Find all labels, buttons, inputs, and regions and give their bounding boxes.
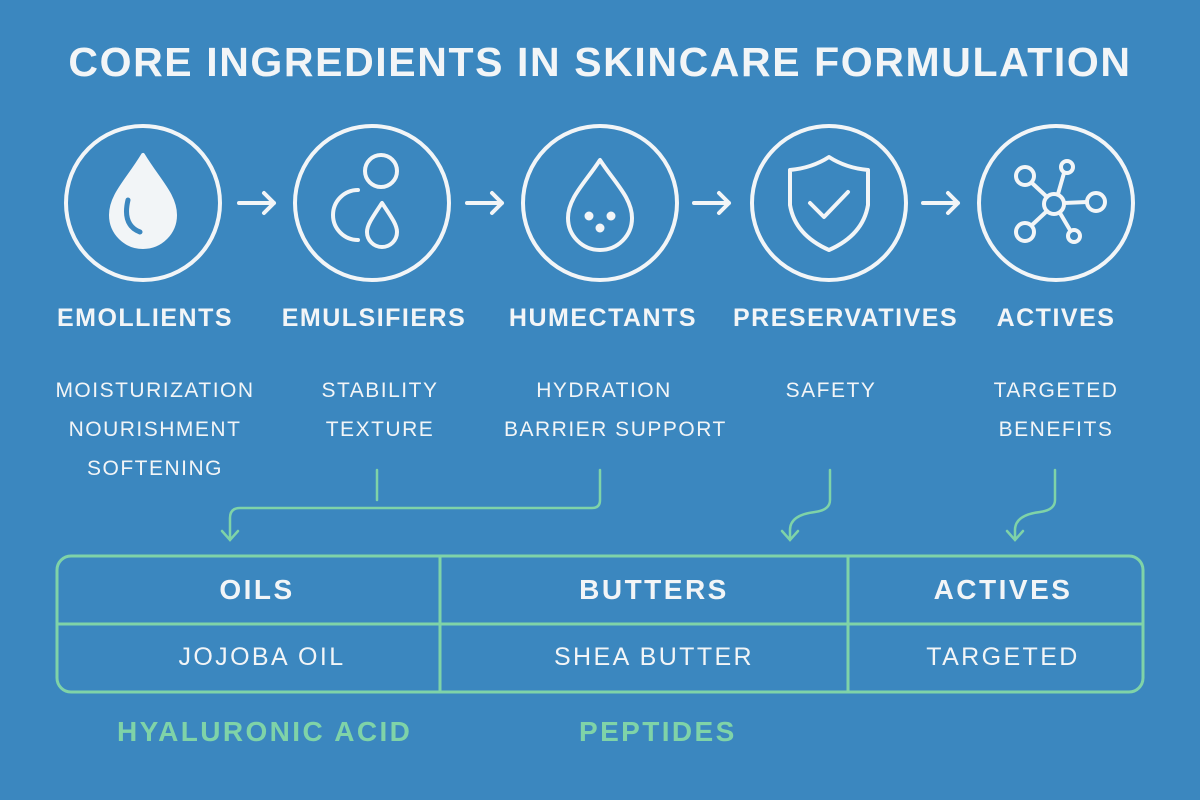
title: CORE INGREDIENTS IN SKINCARE FORMULATION xyxy=(68,39,1132,85)
text: TARGETED xyxy=(994,379,1118,402)
text: BARRIER SUPPORT xyxy=(504,418,727,441)
benefit texts: MOISTURIZATION xyxy=(55,379,255,402)
category labels: EMOLLIENTS xyxy=(57,304,233,332)
icon: humectants xyxy=(523,126,677,280)
text: BUTTERS xyxy=(579,574,729,605)
icon: preservatives shield xyxy=(752,126,906,280)
arrow xyxy=(694,193,729,213)
benefit texts xyxy=(55,379,255,480)
text: HYDRATION xyxy=(536,379,672,402)
text: HUMECTANTS xyxy=(509,304,697,332)
text: EMULSIFIERS xyxy=(282,304,466,332)
icon: actives molecule xyxy=(979,126,1133,280)
benefit texts: NOURISHMENT xyxy=(69,418,241,441)
text: TARGETED xyxy=(926,643,1080,671)
table texts: OILS xyxy=(219,574,295,605)
benefit texts: SOFTENING xyxy=(87,457,223,480)
icon: emulsifiers xyxy=(295,126,449,280)
arrow xyxy=(239,193,274,213)
text: TEXTURE xyxy=(326,418,434,441)
text: SHEA BUTTER xyxy=(554,643,754,671)
arrow xyxy=(923,193,958,213)
text: ACTIVES xyxy=(997,304,1115,332)
text: PEPTIDES xyxy=(579,716,737,747)
text: JOJOBA OIL xyxy=(178,643,346,671)
connectors xyxy=(222,470,1055,540)
text: BENEFITS xyxy=(999,418,1113,441)
text: PRESERVATIVES xyxy=(733,304,958,332)
text: ACTIVES xyxy=(934,574,1072,605)
arrow xyxy=(467,193,502,213)
text: STABILITY xyxy=(322,379,438,402)
icon: emollients drop xyxy=(66,126,220,280)
table xyxy=(57,556,1143,692)
green footnotes: HYALURONIC ACID xyxy=(117,716,412,747)
text: SAFETY xyxy=(786,379,876,402)
